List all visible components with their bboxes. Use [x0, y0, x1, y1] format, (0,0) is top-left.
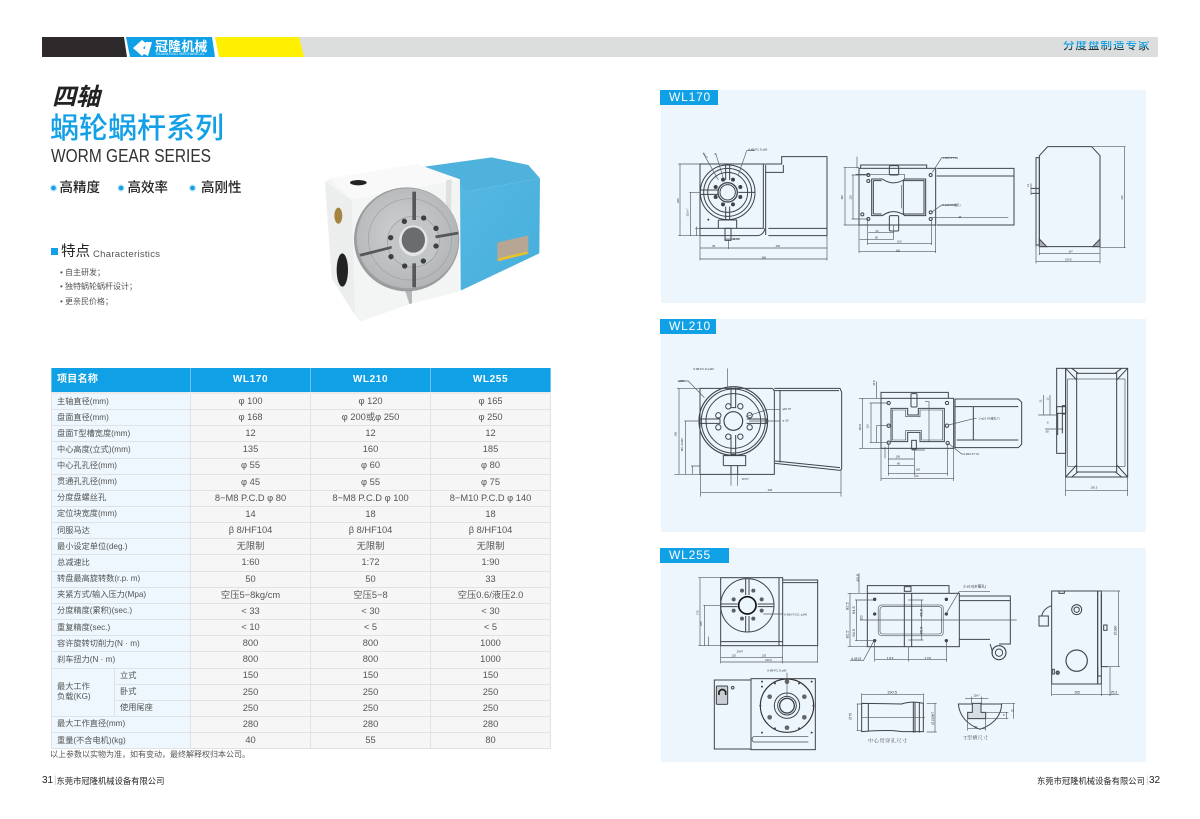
drawing: WL170: 180	[840, 195, 844, 200]
spec table: 250	[243, 703, 258, 713]
characteristics heading	[51, 243, 160, 260]
characteristics heading: 特点	[61, 244, 90, 260]
spec table: 分度盘螺丝孔	[57, 493, 106, 502]
spec table: 主轴直径(mm)	[57, 397, 109, 406]
panel: WL170	[661, 90, 1146, 303]
spec table: 800	[363, 638, 378, 648]
spec table: φ 165	[478, 396, 503, 406]
drawing: WL255: ∅75	[849, 713, 853, 720]
drawing: WL170: 46	[958, 215, 962, 219]
drawing: WL170: 18 H7	[732, 237, 740, 241]
drawing: WL170	[676, 146, 1126, 264]
spec table: φ 200或φ 250	[342, 412, 399, 422]
drawing: WL255: 25.3	[1111, 690, 1117, 694]
drawing: WL170: 80	[875, 236, 878, 240]
spec table: 280	[243, 719, 258, 729]
drawing: WL255: 64.5	[851, 628, 856, 637]
spec table: φ 250	[478, 412, 503, 422]
spec table: φ 80	[481, 460, 500, 470]
spec table: < 30	[361, 606, 380, 616]
spec table: φ 60	[361, 460, 380, 470]
spec table: 800	[363, 654, 378, 664]
spec table: 50	[365, 574, 376, 584]
spec table: φ 120	[358, 396, 383, 406]
caption: T-slot size: T型槽尺寸	[964, 734, 988, 741]
spec table: 总减速比	[57, 558, 90, 567]
drawing: WL255: 43.5	[855, 573, 860, 582]
label: WL170	[660, 90, 718, 105]
drawing: WL210: 180	[916, 468, 921, 472]
spec table: 最大工作直径(mm)	[57, 719, 125, 728]
label: WL210: WL210	[669, 319, 711, 333]
spec table: 280	[483, 719, 498, 729]
drawing: WL170: 100	[897, 239, 902, 243]
drawing: WL210: 4-M10 P.T 10	[963, 452, 980, 456]
spec table: < 10	[241, 622, 260, 632]
drawing: WL210: 160 +0.005	[680, 438, 684, 452]
drawing: WL210: 280	[673, 431, 677, 436]
spec table: 280	[363, 719, 378, 729]
spec table: 1:72	[361, 557, 380, 567]
spec table: φ 75	[481, 477, 500, 487]
drawing: WL170: 380	[762, 255, 767, 259]
drawing: WL255: 135	[762, 653, 767, 657]
spec table: 18	[485, 509, 496, 519]
spec table: 33	[485, 574, 496, 584]
spec table: 135	[243, 444, 258, 454]
characteristics list	[60, 268, 137, 306]
spec table: 185	[483, 444, 498, 454]
characteristics heading: Characteristics	[93, 249, 160, 260]
drawing: WL170: 4-M10 P.T 10	[942, 156, 959, 160]
feature tags	[50, 180, 242, 195]
drawing: WL255: 8-M8 P.C.D φ90	[767, 669, 787, 673]
spec table: 盘面直径(mm)	[57, 413, 109, 422]
spec table: 最小设定单位(deg.)	[57, 542, 128, 551]
spec table: 50	[245, 574, 256, 584]
spec table: 盘面T型槽宽度(mm)	[57, 429, 130, 438]
spec table: 转盘最高旋转数(r.p. m)	[57, 574, 140, 583]
spec table: 空压5−8kg/cm	[221, 590, 280, 600]
spec table: 14	[245, 509, 256, 519]
drawing: WL255: 20	[974, 725, 978, 729]
spec table: 1:90	[481, 557, 500, 567]
spec table: 150	[363, 670, 378, 680]
drawing: WL170: 8-M8 P.C.D φ80	[748, 148, 768, 152]
spec table: WL170	[233, 374, 268, 385]
spec table: 150	[243, 670, 258, 680]
spec table: 重复精度(sec.)	[57, 623, 110, 632]
product photo: rotary table	[325, 157, 540, 322]
spec table: 立式	[120, 671, 136, 680]
caption: center bore size: 中心贯穿孔尺寸	[868, 737, 908, 745]
drawing: WL255: 165	[1074, 690, 1080, 694]
drawing: WL255: ∅100H7	[931, 712, 935, 725]
characteristics list: • 独特蜗轮蜗杆设计；	[60, 282, 137, 291]
drawing: WL255: 20H7	[737, 650, 744, 654]
drawing: WL255: 8	[1003, 713, 1005, 717]
spec table: 8−M8 P.C.D φ 80	[215, 493, 286, 503]
spec table: 分度精度(累积)(sec.)	[57, 606, 132, 615]
drawing: WL255: 65.5	[918, 608, 923, 617]
drawing: WL210: 8	[1047, 420, 1049, 424]
drawing: WL255: 12H7	[973, 694, 980, 698]
spec table: 无限制	[477, 541, 504, 551]
title: english: WORM GEAR SERIES	[51, 146, 211, 166]
spec table: 无限制	[237, 541, 264, 551]
spec table: φ 45	[241, 477, 260, 487]
drawing: WL170: 280	[676, 198, 680, 203]
feature tags: 高效率	[128, 180, 168, 195]
spec table: 使用尾座	[120, 703, 153, 712]
spec table: 伺服马达	[57, 526, 90, 535]
drawing: WL255: 190.5	[887, 689, 898, 694]
spec table: 250	[243, 687, 258, 697]
footer left: 31	[42, 775, 53, 786]
drawing: WL210: 12	[1045, 397, 1049, 400]
drawing: WL255: 2-⌀10(水管孔)	[963, 583, 986, 588]
spec table: 800	[243, 654, 258, 664]
title: worm gear series: 蜗轮蜗杆系列	[50, 113, 224, 145]
spec table: 8−M10 P.C.D φ 140	[450, 493, 531, 503]
spec table: 55	[365, 735, 376, 745]
spec table: 150	[483, 670, 498, 680]
feature tags: 高精度	[60, 180, 100, 195]
spec table: 40	[245, 735, 256, 745]
drawing: WL170: 135 h7	[685, 208, 689, 217]
spec table: < 5	[364, 622, 377, 632]
drawing: WL255: 185	[699, 621, 703, 626]
drawing: WL255: 65.5	[918, 626, 923, 634]
drawing: WL255: 64.5	[851, 605, 856, 614]
spec table: 中心孔孔径(mm)	[57, 461, 117, 470]
drawing: WL255: 8-M10 P.C.D. φ140	[784, 612, 807, 616]
spec table: < 33	[241, 606, 260, 616]
characteristics list: • 更亲民价格；	[60, 296, 113, 306]
drawing: WL210: φ250	[678, 379, 685, 383]
spec table: 夹紧方式/输入压力(Mpa)	[57, 590, 146, 599]
drawing: WL255: 103	[887, 655, 894, 660]
header band	[42, 37, 1158, 57]
spec table: 12	[245, 428, 256, 438]
drawing: WL210	[673, 367, 1128, 497]
drawing: WL170: 2-φ13 H7(锥孔)	[942, 203, 961, 207]
drawing: WL170: 125	[849, 195, 853, 200]
drawing: WL210: 18 H7	[742, 477, 749, 481]
spec table: 无限制	[357, 541, 384, 551]
spec table: 容许旋转切削力(N · m)	[57, 639, 140, 648]
drawing: WL255: 120	[732, 653, 737, 657]
spec table: 80	[485, 735, 496, 745]
spec table: φ 55	[241, 460, 260, 470]
drawing: WL255: 275	[695, 610, 699, 615]
spec table: 1000	[480, 638, 501, 648]
spec table: 1:60	[241, 557, 260, 567]
drawing: WL210: 58	[1046, 429, 1049, 433]
drawing: WL210: φ. 55	[782, 419, 789, 423]
spec table: 250	[483, 703, 498, 713]
footer right: 东莞市冠隆机械设备有限公司	[1037, 776, 1145, 786]
drawing: WL210: 2-φ13 H7(锥孔,T)	[979, 416, 1000, 420]
drawing: WL210: φ60 H7	[782, 407, 792, 411]
characteristics list: • 自主研发；	[60, 268, 105, 276]
drawing: WL255: ∅280	[1113, 626, 1117, 635]
drawing: WL170: 147	[1068, 249, 1073, 253]
spec table: < 5	[484, 622, 497, 632]
spec table: 空压5−8	[353, 590, 388, 600]
drawing: WL210: 150.5	[1091, 485, 1098, 489]
drawing: WL210: 35.8	[872, 380, 876, 386]
table note: 以上参数以实物为准，如有变动，最终解释权归本公司。	[50, 750, 250, 759]
drawing: WL170: 265	[776, 244, 781, 248]
spec table: φ 55	[361, 477, 380, 487]
drawing: WL210: 80	[897, 461, 900, 465]
spec table: β 8/HF104	[229, 525, 272, 535]
spec table: 1000	[480, 654, 501, 664]
drawing: WL170: 21	[1026, 184, 1030, 187]
label: WL255	[660, 548, 729, 563]
spec table: 卧式	[120, 687, 136, 696]
panel: WL255	[661, 548, 1146, 762]
drawing: WL255	[695, 573, 1120, 750]
spec table: 最大工作	[57, 682, 90, 691]
drawing: WL210: 8-M8 P.C.D φ100	[693, 367, 714, 371]
spec table: 项目名称	[57, 374, 98, 385]
spec table	[51, 368, 551, 749]
drawing: WL170: P.C.D	[702, 151, 709, 159]
spec table: 160	[363, 444, 378, 454]
feature tags: 高刚性	[201, 180, 242, 195]
spec table: 重量(不含电机)(kg)	[57, 736, 126, 745]
drawing: WL210: 125	[865, 424, 869, 429]
drawing: WL210: 150.8	[858, 423, 862, 431]
header slogan: 分度盘制造专家	[1063, 40, 1150, 52]
spec table: 定位块宽度(mm)	[57, 509, 117, 518]
logo english: GUANLONG MECHANICAL	[156, 52, 205, 56]
spec table: 负载(KG)	[57, 692, 91, 701]
footer right: |	[1146, 775, 1149, 786]
drawing: WL210: 220	[914, 474, 919, 478]
footer left: 东莞市冠隆机械设备有限公司	[56, 776, 164, 786]
drawing: WL210: 428	[768, 488, 773, 492]
drawing: WL170: 80	[712, 244, 716, 248]
footer right: 32	[1149, 775, 1160, 786]
drawing: WL255: 18	[1011, 709, 1014, 713]
drawing: WL255: 82.5	[844, 630, 849, 638]
spec table: 12	[365, 428, 376, 438]
spec table: 8−M8 P.C.D φ 100	[332, 493, 409, 503]
drawing: WL170: φ	[713, 153, 717, 156]
spec table: 12	[485, 428, 496, 438]
spec table: β 8/HF104	[469, 525, 512, 535]
spec table: 250	[363, 687, 378, 697]
drawing: WL255: 443.5	[765, 658, 772, 662]
spec table: 贯通孔孔径(mm)	[57, 477, 117, 486]
logo name: 冠隆机械	[155, 39, 207, 54]
drawing: WL170: 154.5	[1065, 258, 1072, 262]
spec table: 800	[243, 638, 258, 648]
spec table: φ 168	[238, 412, 263, 422]
spec table: 空压0.6/液压2.0	[458, 590, 523, 600]
spec table: 中心高度(立式)(mm)	[57, 445, 131, 454]
title: four axis: 四轴	[52, 84, 100, 111]
spec table: 刹车扭力(N · m)	[57, 655, 115, 664]
label: WL170: WL170	[669, 90, 711, 104]
spec table: WL210	[353, 374, 388, 385]
panel: WL210	[661, 319, 1146, 532]
spec table: β 8/HF104	[349, 525, 392, 535]
drawing: WL255: 4-Ø13	[851, 657, 861, 661]
drawing: WL170: 60	[876, 229, 879, 233]
spec table: 250	[483, 687, 498, 697]
spec table: φ 100	[238, 396, 263, 406]
drawing: WL210: 21	[1039, 399, 1043, 402]
drawing: WL255: 82.5	[844, 601, 849, 610]
drawing: WL255: 20	[858, 615, 863, 620]
drawing: WL255: 120	[924, 655, 932, 660]
spec table: 250	[363, 703, 378, 713]
label: WL255: WL255	[669, 548, 711, 562]
spec table: < 30	[481, 606, 500, 616]
drawing: WL170: 225	[1120, 195, 1124, 200]
spec table: WL255	[473, 374, 508, 385]
drawing: WL210: 100	[896, 455, 901, 459]
spec table: 18	[365, 509, 376, 519]
footer left: |	[54, 775, 57, 786]
drawing: WL170: 160	[896, 248, 901, 252]
